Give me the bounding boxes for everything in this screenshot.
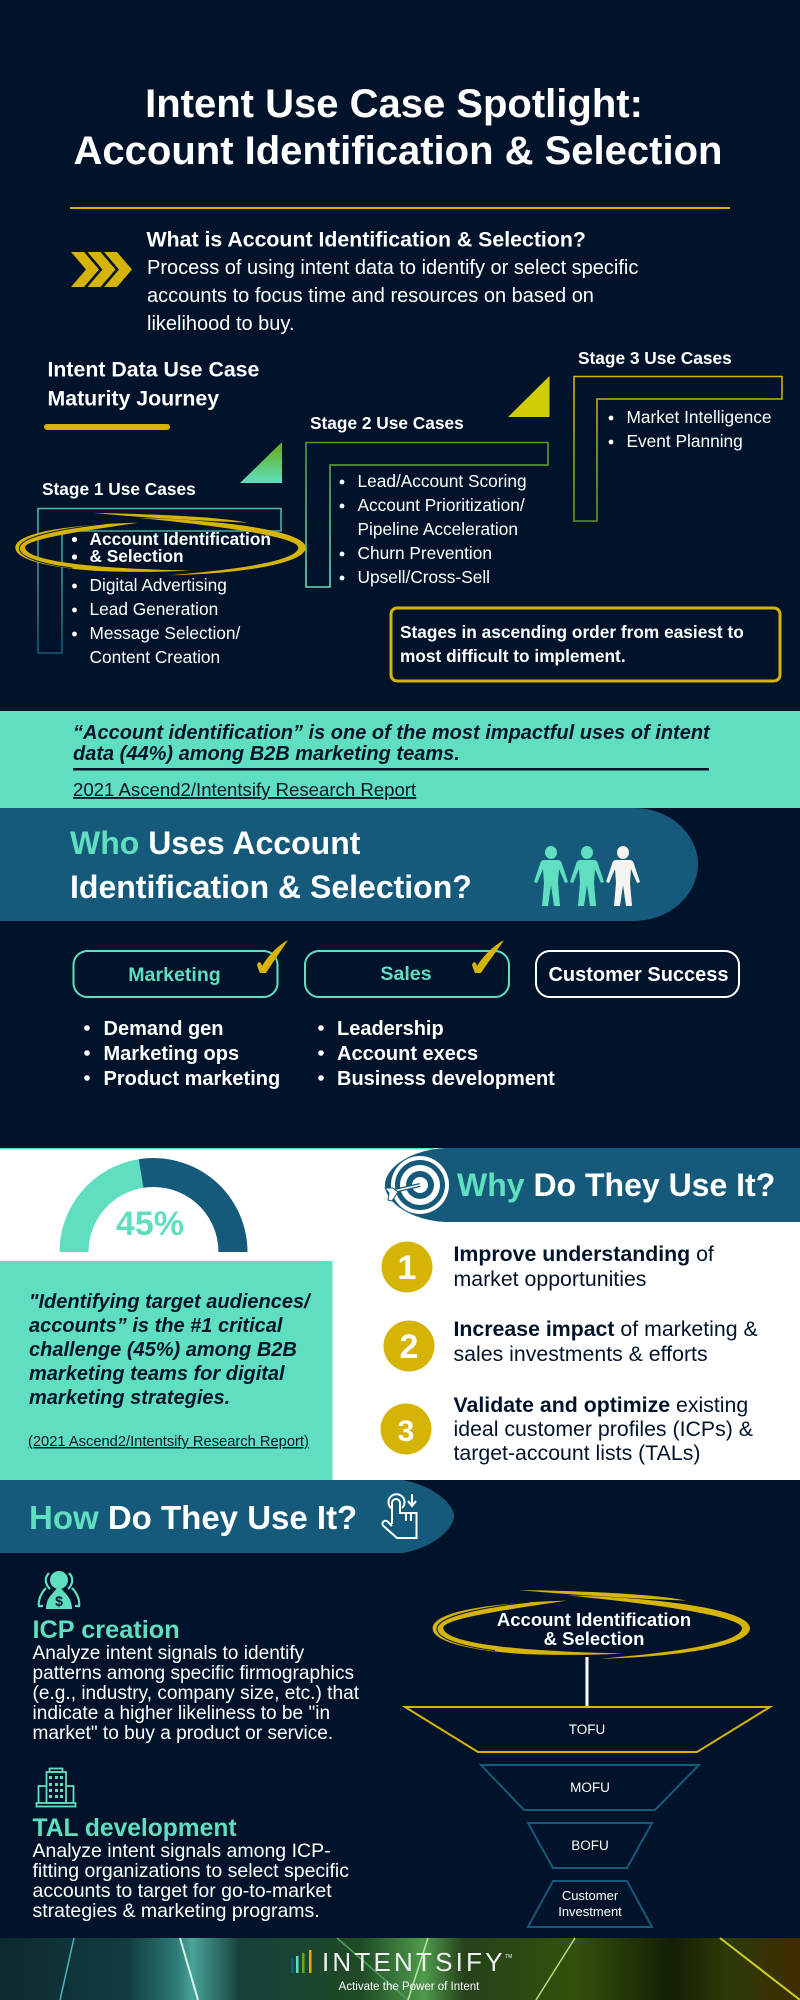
icon: pointing hand [382,1494,416,1538]
footer [0,1938,800,2000]
panel: teal stat quote: (2021 Ascend2/Intentsify Research Report) [28,1434,309,1450]
reason 1 [382,1242,714,1292]
panel: stage 1: Digital Advertising [90,575,227,595]
reason 3: Validate and optimize existing [454,1393,748,1417]
icon: gold chevrons [71,252,132,287]
panel: white section background [0,1148,800,1480]
panel: stage 1 [38,442,282,667]
icon: office building [36,1768,76,1806]
reason 2 [384,1317,758,1372]
panel: teal stat quote: "Identifying target audiences/ [29,1291,312,1313]
logo: Activate the Power of Intent [339,1981,480,1993]
panel: sales team: Business development [337,1068,555,1090]
panel: icp creation: market" to buy a product or service. [32,1723,333,1744]
highlight: brush ellipse with label [433,1590,750,1659]
panel: why banner: Why Do They Use It? [457,1167,775,1203]
funnel stage: MOFU: MOFU [570,1780,610,1795]
title: Account Identification & Selection [74,129,722,173]
panel: teal quote band: data (44%) among B2B marketing teams. [73,743,460,765]
panel: tal development: strategies & marketing programs. [32,1900,320,1922]
panel: sales team: Leadership [337,1018,444,1040]
reason 1: 1 [398,1249,416,1287]
panel: tal development: accounts to target for go-to-market [32,1880,332,1902]
reason 1: Improve understanding of [454,1242,714,1266]
panel: teal stat quote [0,1261,332,1480]
reason 2: Increase impact of marketing & [454,1317,758,1341]
panel: marketing team [74,940,288,1090]
reason 2: 2 [400,1328,418,1366]
reason 3: target-account lists (TALs) [454,1441,700,1465]
definition text block: What is Account Identification & Selection? [146,228,586,252]
panel: marketing team: Marketing ops [104,1043,239,1065]
logo: TM [505,1954,512,1960]
icon: customer profile with dollar: $ [55,1593,63,1609]
icon: check mark [257,940,288,973]
reason 3 [380,1393,753,1465]
highlight: brush ellipse with label: & Selection [544,1628,644,1649]
panel: tal development [32,1768,349,1922]
panel: teal stat quote: challenge (45%) among B2B [29,1339,297,1361]
panel: sales team [305,940,555,1090]
panel: stage 2: Churn Prevention [358,543,492,563]
definition text block: likelihood to buy. [147,313,294,335]
panel: icp creation: indicate a higher likeliness to be "in [32,1703,330,1724]
heading: maturity journey [44,358,260,430]
panel: stage 3: Market Intelligence [626,407,772,427]
icon: target with arrow [385,1156,449,1214]
funnel stage: customer investment [528,1881,652,1927]
panel: stage 2: Upsell/Cross-Sell [358,567,490,587]
callout: stages note: most difficult to implement. [400,646,626,666]
reason 2: sales investments & efforts [454,1342,708,1366]
funnel stage: MOFU [481,1765,699,1810]
panel: icp creation: (e.g., industry, company size, etc.) that [32,1683,360,1704]
highlight: brush ellipse around stage 1 item [15,513,306,575]
heading: maturity journey: Maturity Journey [48,386,219,410]
panel: teal stat quote: marketing strategies. [29,1387,230,1409]
panel: teal quote band [0,711,800,808]
panel: stage 2: Account Prioritization/ [358,495,525,515]
panel: teal quote band: “Account identification” is one of the most impactful uses of intent [73,722,711,744]
logo [291,1947,512,1993]
panel: tal development: TAL development [32,1815,237,1842]
panel: stage 1: Message Selection/ [90,623,241,643]
panel: customer success team: Customer Success [548,964,729,986]
definition text block: accounts to focus time and resources on based on [147,285,594,307]
diagram: funnel [405,1590,770,1927]
heading: maturity journey: Intent Data Use Case [48,358,260,382]
panel: why banner [385,1148,800,1222]
funnel stage: customer investment: Customer [562,1888,619,1903]
definition text block: Process of using intent data to identify or select specific [147,257,638,279]
panel: stage 2 [306,376,550,587]
panel: stage 2: Lead/Account Scoring [358,471,527,491]
panel: marketing team: Marketing [128,964,221,986]
panel: stage 2: Stage 2 Use Cases [310,413,464,433]
reason 1: market opportunities [454,1267,646,1291]
panel: icp creation: ICP creation [32,1616,180,1644]
icon: customer profile with dollar [39,1571,79,1609]
panel: stage 3 [574,348,782,521]
panel: teal quote band: 2021 Ascend2/Intentsify Research Report [73,779,417,800]
panel: stage 1: Lead Generation [90,599,218,619]
panel: how banner [0,1480,454,1553]
panel: stage 2: Pipeline Acceleration [358,519,518,539]
panel: how banner: How Do They Use It? [29,1499,357,1536]
panel: teal stat quote: marketing teams for digital [29,1363,285,1385]
panel: who banner: Who Uses Account [70,825,361,861]
funnel stage: BOFU: BOFU [571,1838,609,1853]
panel: tal development: Analyze intent signals among ICP- [32,1840,331,1862]
panel: stage 3: Stage 3 Use Cases [578,348,732,368]
panel: sales team: Account execs [337,1043,478,1065]
panel: teal stat quote: accounts” is the #1 critical [29,1315,283,1337]
panel: who banner: Identification & Selection? [70,869,472,905]
panel: marketing team: Product marketing [104,1068,280,1090]
panel: stage 1: Content Creation [90,647,220,667]
reason 3: 3 [398,1415,414,1448]
chart: 45% gauge [60,1158,248,1252]
panel: stage 1: Account Identification [90,529,271,549]
panel: marketing team: Demand gen [104,1018,224,1040]
reason 3: ideal customer profiles (ICPs) & [454,1417,753,1441]
panel: who banner [0,808,698,921]
panel: stage 1: & Selection [90,546,184,566]
panel: icp creation: Analyze intent signals to identify [32,1643,305,1664]
funnel stage: customer investment: Investment [558,1904,622,1919]
funnel stage: BOFU [528,1823,652,1868]
panel: icp creation [32,1571,360,1744]
callout: stages note [391,608,780,681]
panel: stage 3: Event Planning [626,431,743,451]
panel: icp creation: patterns among specific firmographics [32,1663,354,1684]
title: Intent Use Case Spotlight: [145,82,643,126]
highlight: brush ellipse with label: Account Identification [497,1609,691,1630]
definition text block [146,228,638,335]
panel: tal development: fitting organizations to select specific [32,1860,349,1882]
panel: stage 1: Stage 1 Use Cases [42,479,196,499]
funnel stage: TOFU: TOFU [569,1722,605,1737]
callout: stages note: Stages in ascending order from easiest to [400,622,744,642]
icon: three people [534,846,640,906]
icon: check mark [472,940,504,973]
panel: sales team: Sales [380,963,432,985]
funnel stage: TOFU [405,1707,770,1752]
logo: INTENTSIFY [322,1947,506,1977]
panel: customer success team [536,951,739,997]
title [74,82,722,173]
chart: 45% gauge: 45% [116,1205,184,1243]
